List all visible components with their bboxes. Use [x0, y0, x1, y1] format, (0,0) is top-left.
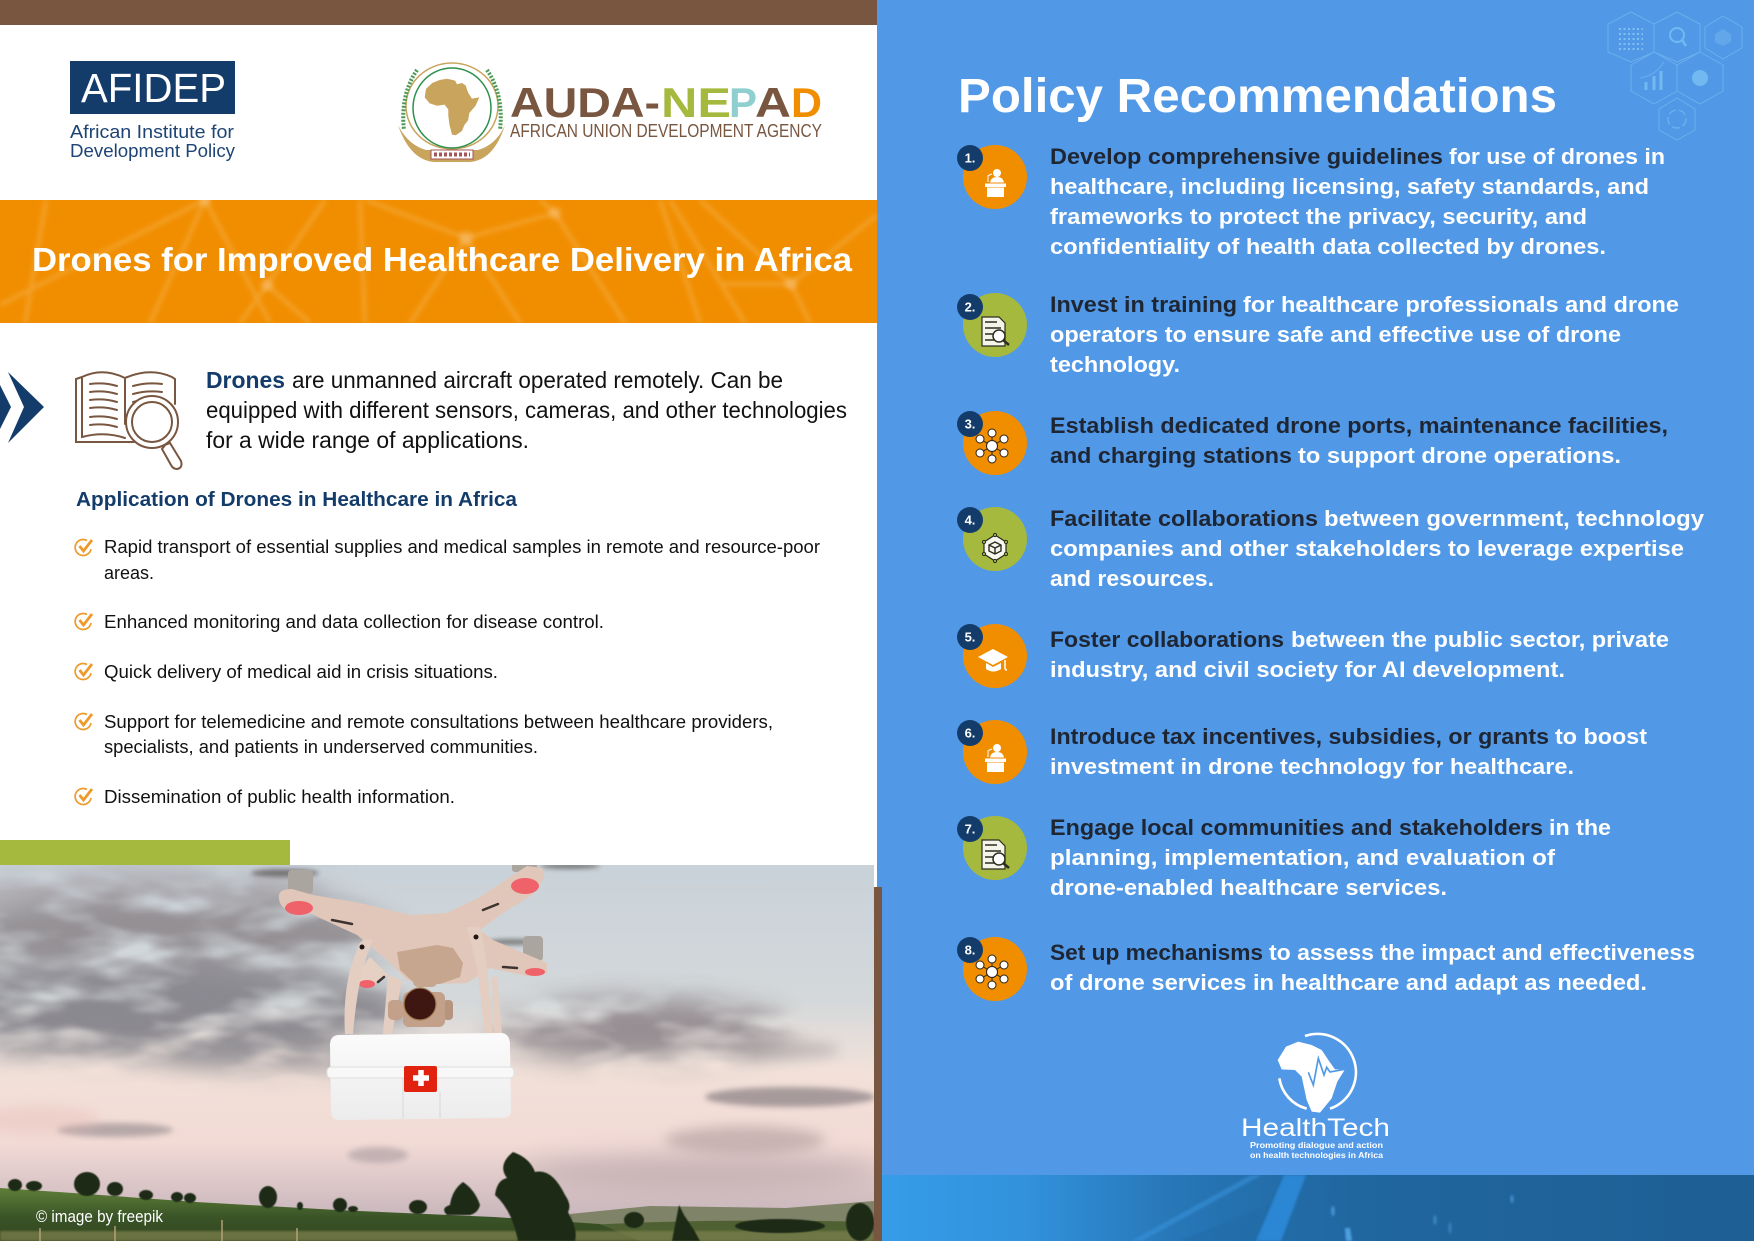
icon: Africa with heartbeat	[1278, 1034, 1356, 1113]
medical kit	[327, 1033, 514, 1120]
propellers	[251, 863, 600, 945]
badge and hexagon icon	[957, 507, 1027, 571]
text: drone definition: are unmanned aircraft operated remotely. Can be	[292, 367, 783, 393]
recommendation 4: Facilitate collaborations	[1050, 506, 1318, 531]
recommendation 4	[957, 506, 1705, 591]
bullet 4	[75, 712, 773, 757]
badge and document icon	[957, 816, 1027, 880]
recommendation 7	[957, 815, 1611, 900]
bullet 4: specialists, and patients in underserved communities.	[104, 737, 538, 757]
legs	[344, 927, 502, 1034]
badge and graduation cap icon	[957, 624, 1027, 688]
bullet 5: Dissemination of public health information.	[104, 787, 455, 807]
logo: AFIDEP	[70, 61, 235, 161]
sky clouds	[0, 868, 880, 1190]
text: drone definition: equipped with different sensors, cameras, and other technologies	[206, 397, 847, 423]
logo: HealthTech: Promoting dialogue and action	[1250, 1140, 1383, 1150]
banner title text: Drones for Improved Healthcare Delivery in Africa	[32, 241, 853, 278]
icon: chevrons	[0, 372, 44, 443]
bullet 3: Quick delivery of medical aid in crisis situations.	[104, 662, 498, 682]
recommendation 3: Establish dedicated drone ports, maintenance facilities,	[1050, 413, 1668, 438]
photo credit: © image by freepik	[36, 1208, 164, 1226]
recommendation 6: investment in drone technology for healthcare.	[1050, 754, 1574, 779]
recommendation 3: to support drone operations.	[1298, 443, 1621, 468]
recommendation 6	[957, 720, 1648, 784]
logo: AUDA-NEPAD: AFRICAN UNION DEVELOPMENT AGENCY	[510, 121, 822, 141]
badge and podium icon	[957, 145, 1027, 209]
recommendation 4: and resources.	[1050, 566, 1214, 591]
badge and network icon: 8.	[965, 942, 975, 958]
rear arm	[360, 957, 388, 985]
recommendation 5	[957, 624, 1669, 688]
top brown bar	[0, 0, 877, 25]
icon: book and magnifier	[76, 372, 182, 469]
recommendation 4: companies and other stakeholders to leverage expertise	[1050, 536, 1684, 561]
blue bottom band	[882, 1175, 1754, 1241]
recommendation 1: confidentiality of health data collected by drones.	[1050, 234, 1606, 259]
logo: AUDA-NEPAD: A	[755, 79, 791, 126]
logo: AFIDEP: Development Policy	[70, 141, 235, 161]
recommendation 6: Introduce tax incentives, subsidies, or grants	[1050, 724, 1549, 749]
recommendation 5: between the public sector, private	[1291, 627, 1669, 652]
airframe	[279, 866, 547, 984]
recommendation 2: technology.	[1050, 352, 1180, 377]
list: applications	[75, 537, 820, 807]
recommendation 1: for use of drones in	[1449, 144, 1665, 169]
badge and podium icon: 6.	[965, 726, 975, 740]
motors	[288, 858, 543, 961]
recommendation 2: Invest in training	[1050, 292, 1237, 317]
bullet 4: Support for telemedicine and remote consultations between healthcare providers,	[104, 712, 773, 732]
panel: blue policy recommendations background	[877, 0, 1754, 1241]
recommendation 1	[957, 144, 1665, 259]
recommendation 8: to assess the impact and effectiveness	[1269, 940, 1695, 965]
logo: AFIDEP: AFIDEP	[81, 65, 226, 111]
recommendation 5: Foster collaborations	[1050, 627, 1284, 652]
drone	[251, 858, 600, 1034]
logo: AUDA-NEPAD: P	[729, 79, 757, 126]
title banner	[0, 194, 877, 323]
red lights	[285, 878, 545, 988]
text: drone definition	[206, 367, 847, 453]
badge and document icon: 7.	[965, 822, 975, 836]
badge and document icon	[957, 293, 1027, 357]
logo: AUDA-NEPAD: AUDA-	[510, 79, 660, 126]
badge and hexagon icon: 4.	[965, 512, 975, 528]
recommendation 5: industry, and civil society for AI development.	[1050, 657, 1565, 682]
badge and podium icon: 1.	[965, 150, 975, 166]
logo: HealthTech	[1241, 1034, 1390, 1160]
recommendation 2: for healthcare professionals and drone	[1243, 292, 1679, 317]
green accent bar	[0, 840, 290, 865]
recommendation 3	[957, 411, 1668, 475]
recommendation 7: planning, implementation, and evaluation of	[1050, 845, 1556, 870]
gimbal and camera	[388, 982, 453, 1027]
heading: Policy Recommendations: Policy Recommendations	[958, 70, 1557, 123]
recommendation 3: and charging stations	[1050, 443, 1292, 468]
brown vertical strip	[874, 887, 882, 1241]
badge and document icon: 2.	[965, 300, 975, 314]
heading: application of drones: Application of Drones in Healthcare in Africa	[76, 488, 518, 511]
recommendation 7: in the	[1549, 815, 1611, 840]
logo: AUDA-NEPAD	[398, 63, 822, 162]
recommendation 1: healthcare, including licensing, safety standards, and	[1050, 174, 1649, 199]
white left page background	[0, 0, 877, 1241]
logo: HealthTech: on health technologies in Africa	[1250, 1150, 1383, 1160]
ground and trees	[0, 1152, 874, 1241]
bullet 1	[75, 537, 820, 583]
recommendation 1: frameworks to protect the privacy, security, and	[1050, 204, 1587, 229]
photo: drone carrying medical kit	[0, 858, 880, 1241]
badge and network icon	[957, 411, 1027, 475]
emblem: African Union	[398, 63, 505, 162]
logo: HealthTech: HealthTech	[1241, 1114, 1390, 1142]
bullet 1: areas.	[104, 563, 154, 583]
bullet 1: Rapid transport of essential supplies and medical samples in remote and resource-poor	[104, 537, 820, 557]
recommendation 7: Engage local communities and stakeholders	[1050, 815, 1543, 840]
badge and podium icon	[957, 720, 1027, 784]
recommendation 8	[957, 937, 1695, 1001]
text: drone definition: Drones	[206, 367, 285, 393]
recommendation 2: operators to ensure safe and effective use of drone	[1050, 322, 1621, 347]
decoration: hexagon data icons	[1608, 12, 1742, 140]
recommendation 4: between government, technology	[1324, 506, 1705, 531]
vent slots	[332, 904, 517, 982]
recommendation 8: Set up mechanisms	[1050, 940, 1263, 965]
bullet 2: Enhanced monitoring and data collection for disease control.	[104, 612, 604, 632]
logo: AUDA-NEPAD: NE	[661, 79, 731, 126]
badge and graduation cap icon: 5.	[965, 630, 975, 644]
text: drone definition: for a wide range of applications.	[206, 427, 529, 453]
badge and network icon: 3.	[965, 416, 975, 432]
recommendation 1: Develop comprehensive guidelines	[1050, 144, 1443, 169]
badge and network icon	[957, 937, 1027, 1001]
recommendation 2	[957, 292, 1679, 377]
logo: AUDA-NEPAD: D	[791, 79, 822, 126]
recommendation 8: of drone services in healthcare and adapt as needed.	[1050, 970, 1647, 995]
recommendation 6: to boost	[1555, 724, 1648, 749]
recommendation 7: drone-enabled healthcare services.	[1050, 875, 1447, 900]
logo: AFIDEP: African Institute for	[70, 122, 234, 142]
